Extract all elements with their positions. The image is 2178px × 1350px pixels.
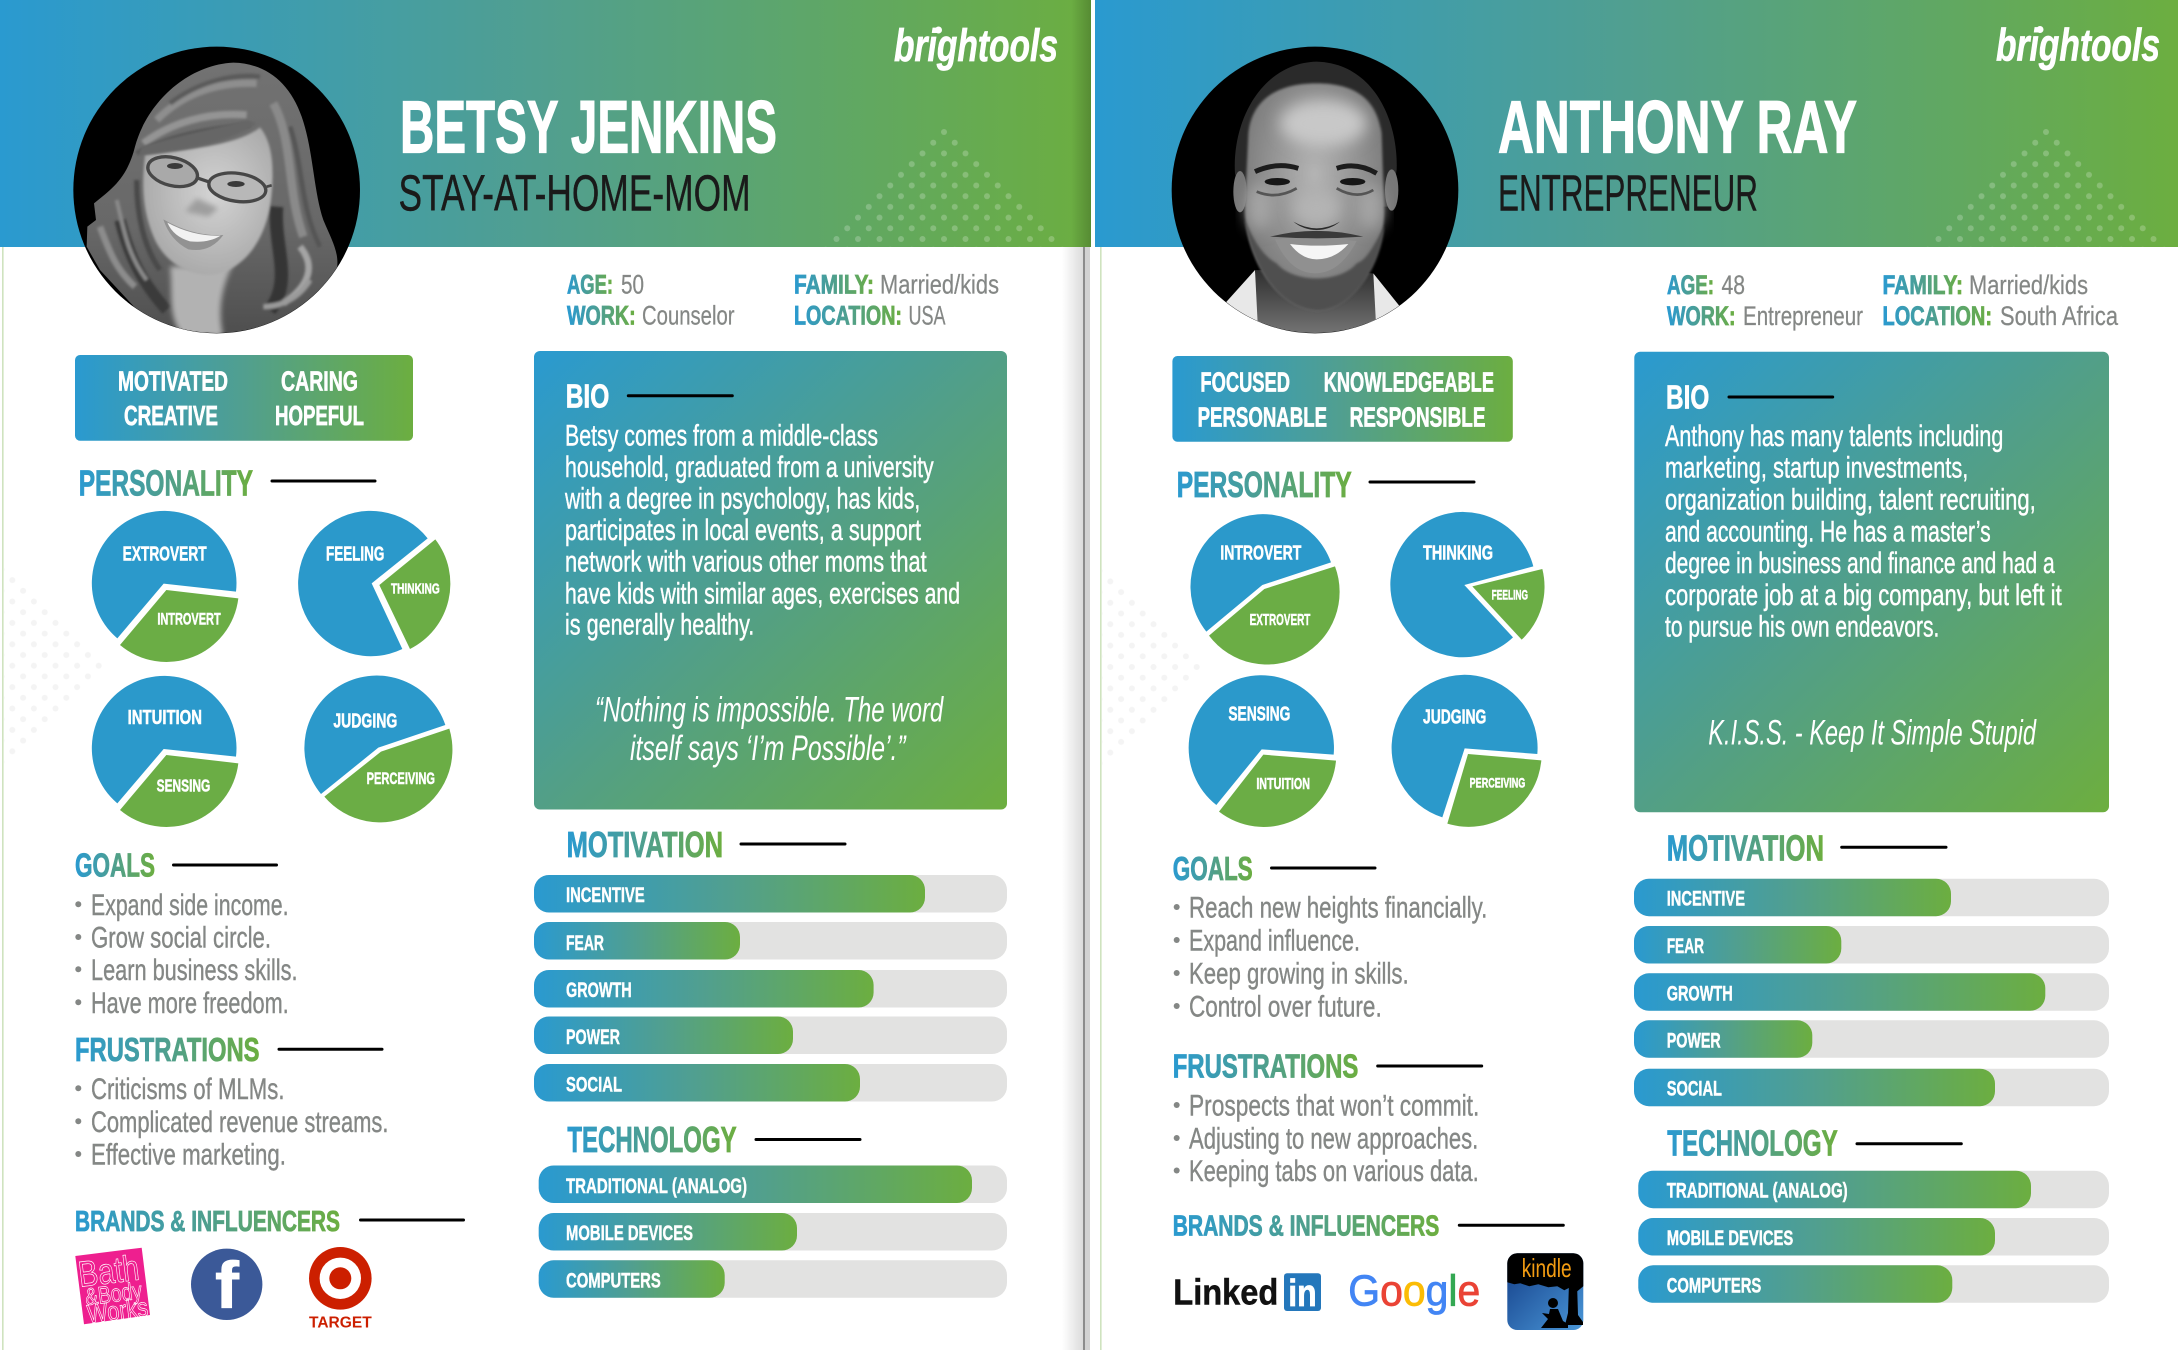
page fold shadow on header [1071,0,1091,247]
panel: bio: “Nothing is impossible. The word [595,691,944,730]
occupation: ENTREPRENEUR [1498,165,1758,222]
occupation: STAY-AT-HOME-MOM [398,165,750,222]
frustrations list [1174,1090,1479,1188]
bar: fear: FEAR [566,932,604,955]
frustrations list: Complicated revenue streams. [91,1106,388,1139]
name: ANTHONY RAY [1498,86,1857,169]
bar: computers [1638,1265,2109,1303]
pie: feeling / thinking: THINKING [391,581,440,597]
frustrations list: Effective marketing. [91,1139,286,1172]
heading: personality: PERSONALITY [1177,464,1352,505]
panel: bio: itself says ‘I’m Possible’.” [630,729,907,768]
frustrations list [75,1073,389,1172]
panel: bio: BIO [566,378,609,415]
goals list: Have more freedom. [91,987,289,1020]
panel: bio: network with various other moms that [565,546,927,579]
icon: Bath and Body Works: Works [85,1292,150,1329]
icon: Bath and Body Works: &Body [84,1278,143,1311]
icon: Google: Google [1348,1267,1480,1316]
icon: LinkedIn: Linked [1173,1271,1278,1312]
bar: social: SOCIAL [566,1074,622,1096]
traits box [1172,356,1513,442]
panel: Anthony Ray persona [1095,0,2178,1330]
bar: fear: FEAR [1667,935,1704,958]
bar: mobile devices [539,1213,1007,1250]
demographics: LOCATION: [1882,301,1992,331]
pie: introvert / extrovert [1190,514,1340,664]
bar: incentive [1634,879,2109,916]
heading: motivation: MOTIVATION [1667,827,1824,868]
panel: bio: participates in local events, a support [565,514,921,547]
heading: technology: TECHNOLOGY [1667,1123,1838,1164]
traits box: PERSONABLE [1198,401,1327,432]
pie: introvert / extrovert: INTROVERT [1220,543,1301,565]
heading: goals: GOALS [75,847,155,884]
demographics: FAMILY: [794,269,874,299]
traits box: RESPONSIBLE [1350,401,1486,432]
pie: extrovert / introvert: INTROVERT [157,610,221,629]
traits box: CARING [281,366,358,397]
heading: personality: PERSONALITY [79,463,253,504]
demographics: WORK: [1667,301,1736,331]
name: BETSY JENKINS [400,86,777,169]
pie: judging / perceiving: JUDGING [333,711,397,733]
frustrations list: Criticisms of MLMs. [91,1073,284,1106]
pie: thinking / feeling: FEELING [1492,588,1528,603]
icon: Bath and Body Works [75,1246,150,1330]
panel: bio: household, graduated from a university [565,451,934,484]
pie charts [1189,512,1545,827]
pie: judging / perceiving [1392,675,1541,827]
panel: bio: is generally healthy. [565,609,754,642]
traits box: KNOWLEDGEABLE [1324,367,1494,398]
bar chart: motivation [1634,879,2109,1106]
heading: frustrations: FRUSTRATIONS [1173,1048,1358,1085]
goals list: Expand influence. [1189,925,1360,958]
panel: bio [1634,352,2109,812]
demographics [567,269,999,330]
traits box: FOCUSED [1200,367,1290,398]
portrait: Anthony [1172,47,1458,337]
heading: goals: GOALS [1173,850,1253,887]
page gutter [1083,247,1102,1350]
bar: incentive [534,875,1007,912]
header dot triangle [821,124,1067,247]
bar: mobile devices: MOBILE DEVICES [1667,1227,1793,1250]
heading: motivation: MOTIVATION [567,824,723,865]
icon: Target: TARGET [309,1314,372,1331]
bar: social: SOCIAL [1667,1078,1722,1101]
icon: Bath and Body Works: Bath [76,1247,141,1295]
portrait: Betsy [73,47,360,337]
traits box [75,355,413,441]
bar: growth: GROWTH [1667,982,1733,1005]
bar: computers [539,1260,1007,1298]
bar: traditional: TRADITIONAL (ANALOG) [566,1175,747,1198]
frustrations list: Prospects that won’t commit. [1189,1090,1479,1123]
bar: social [1634,1069,2109,1106]
pie: judging / perceiving: JUDGING [1423,707,1486,729]
icon: Kindle [1507,1253,1583,1330]
heading: technology: TECHNOLOGY [567,1119,737,1160]
icon: LinkedIn: in [1288,1273,1317,1315]
pie: sensing / intuition [1189,675,1336,827]
demographics: USA [908,300,946,330]
bar: power [1634,1020,2109,1058]
header dot triangle [1923,124,2169,247]
bar: traditional [1638,1171,2109,1208]
demographics: WORK: [567,300,636,330]
pie: extrovert / introvert [92,511,238,662]
panel: bio: Betsy comes from a middle-class [565,419,878,452]
pie: judging / perceiving: PERCEIVING [367,769,435,788]
pie charts [92,511,452,827]
bar: mobile devices: MOBILE DEVICES [566,1222,693,1245]
demographics: Married/kids [1969,270,2088,300]
pie: intuition / sensing: INTUITION [128,707,202,729]
panel: bio [534,351,1007,810]
page fold shadow [1062,247,1083,1350]
pie: judging / perceiving [304,676,452,822]
bar: growth [1634,973,2109,1011]
panel: bio: to pursue his own endeavors. [1665,610,1939,643]
goals list: Control over future. [1189,990,1382,1023]
demographics: Married/kids [880,269,999,299]
side dot pattern [1102,564,1205,770]
bar chart: motivation [534,875,1007,1102]
pie: sensing / intuition: SENSING [1228,703,1290,725]
goals list: Expand side income. [91,889,288,922]
goals list: Learn business skills. [91,954,298,987]
bar: growth [534,970,1007,1008]
bar: power [534,1016,1007,1054]
panel: Betsy Jenkins persona [0,0,1091,1350]
pie: sensing / intuition: INTUITION [1256,776,1310,793]
traits box: CREATIVE [124,400,218,431]
panel: bio: and accounting. He has a master’s [1665,515,1991,548]
logo: brightools [894,20,1058,71]
demographics: South Africa [2000,301,2119,331]
goals list [75,889,298,1020]
pie: introvert / extrovert: EXTROVERT [1250,612,1311,629]
pie: intuition / sensing [92,676,238,827]
panel: bio: marketing, startup investments, [1665,452,1968,485]
demographics: FAMILY: [1882,270,1963,300]
frustrations list: Keeping tabs on various data. [1189,1155,1479,1188]
bar: incentive: INCENTIVE [1667,888,1745,911]
pie: feeling / thinking: FEELING [326,544,384,566]
bar: traditional: TRADITIONAL (ANALOG) [1667,1180,1848,1203]
panel: bio: have kids with similar ages, exercises and [565,577,960,610]
pie: extrovert / introvert: EXTROVERT [123,544,207,566]
goals list [1174,892,1487,1023]
heading: frustrations: FRUSTRATIONS [75,1031,260,1068]
bar: computers: COMPUTERS [566,1270,661,1292]
bar: computers: COMPUTERS [1667,1274,1761,1297]
heading: brands and influencers: BRANDS & INFLUENCERS [1173,1211,1439,1243]
bar chart: technology [1638,1171,2109,1303]
pie: thinking / feeling: THINKING [1423,543,1493,565]
header band [0,0,1091,247]
panel: bio: BIO [1666,379,1709,416]
goals list: Reach new heights financially. [1189,892,1487,925]
icon: Facebook: f [215,1248,240,1322]
goals list: Keep growing in skills. [1189,957,1409,990]
bar: growth: GROWTH [566,979,632,1002]
demographics: Counselor [642,300,734,330]
demographics: AGE: [1667,270,1714,300]
panel: bio: organization building, talent recruiting, [1665,483,2036,516]
bar: incentive: INCENTIVE [566,884,645,907]
frustrations list: Adjusting to new approaches. [1189,1122,1478,1155]
traits box: HOPEFUL [275,400,364,431]
bar: traditional [539,1166,1007,1203]
panel: bio: with a degree in psychology, has kids, [564,483,920,516]
icon: Target [309,1247,372,1331]
bar: fear [1634,926,2109,964]
bar: social [534,1064,1007,1102]
demographics: LOCATION: [794,300,902,330]
traits box: MOTIVATED [118,366,228,397]
demographics: Entrepreneur [1743,301,1863,331]
icon: Kindle: kindle [1522,1253,1572,1283]
bar chart: technology [539,1166,1007,1298]
pie: judging / perceiving: PERCEIVING [1470,775,1525,790]
pie: thinking / feeling [1390,512,1545,657]
goals list: Grow social circle. [91,922,271,955]
heading: brands and influencers: BRANDS & INFLUENCERS [75,1206,340,1238]
demographics: AGE: [567,269,613,299]
page left border [2,247,4,1350]
demographics: 50 [621,269,644,299]
bar: fear [534,922,1007,960]
side dot pattern [4,563,107,769]
pie: intuition / sensing: SENSING [157,775,210,795]
demographics: 48 [1722,270,1745,300]
bar: mobile devices [1638,1218,2109,1256]
bar: power: POWER [1667,1030,1721,1053]
demographics [1667,270,2119,331]
header band [1095,0,2178,247]
pie: feeling / thinking [298,511,450,656]
panel: bio: Anthony has many talents including [1665,420,2003,453]
icon: Facebook [191,1248,262,1322]
bar: power: POWER [566,1026,620,1049]
